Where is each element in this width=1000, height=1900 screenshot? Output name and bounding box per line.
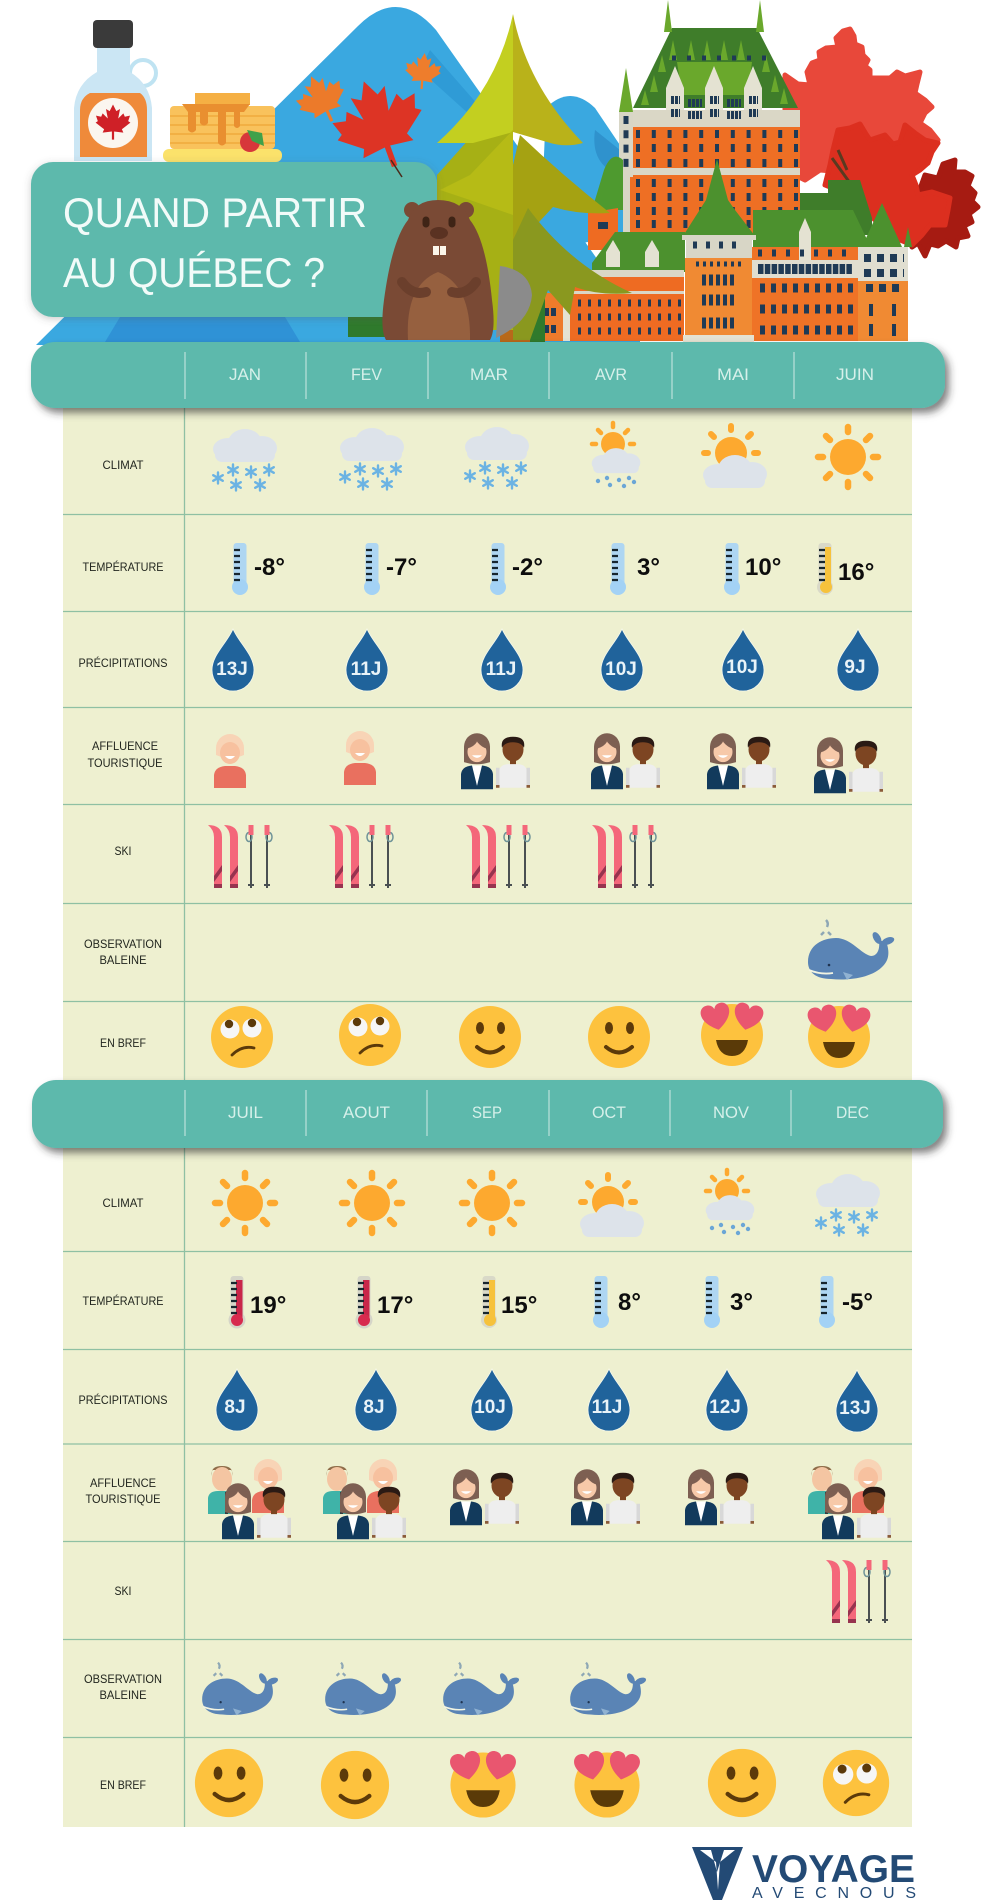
- jan days: 13J: [216, 659, 248, 680]
- jan snow: [213, 429, 277, 490]
- mountain facet right: [594, 130, 620, 175]
- label: PRÉCIPITATIONS: [78, 657, 168, 670]
- shaded mountain base: [105, 317, 300, 342]
- apr sun rain: [592, 423, 640, 488]
- right tower lower: [858, 281, 908, 341]
- may thermometer: [724, 543, 740, 595]
- main roof: [633, 28, 798, 108]
- strawberry: [240, 132, 260, 152]
- right tower tall windows: [871, 304, 894, 341]
- dormer right: [799, 218, 811, 262]
- light red foliage: [785, 29, 938, 180]
- small orange house: [588, 208, 618, 250]
- row: baleine 2: [84, 1663, 647, 1715]
- pavilion windows mid: [702, 280, 735, 323]
- aug drop: [355, 1369, 397, 1431]
- left wing dormers: [606, 240, 659, 267]
- castle: Château Frontenac: [540, 0, 912, 342]
- month band 2: [32, 1080, 943, 1148]
- left wing roof: [592, 232, 685, 272]
- FEV: FEV: [351, 365, 383, 384]
- beaver: [382, 200, 532, 340]
- mar ski: [466, 825, 530, 888]
- label: PRÉCIPITATIONS: [78, 1394, 168, 1407]
- illustration: Quebec skyline header: [36, 0, 978, 345]
- row: ski 2: [114, 1560, 890, 1623]
- aug whale: [325, 1663, 402, 1715]
- pancake lines: [170, 116, 275, 143]
- green hill behind: [592, 157, 623, 210]
- dec days: 13J: [839, 1398, 871, 1419]
- roof spires: [641, 0, 788, 105]
- SEP: SEP: [472, 1103, 502, 1122]
- feb thermometer: [364, 543, 380, 595]
- tower walls: [630, 120, 800, 240]
- jan thermometer: [232, 543, 248, 595]
- top layer left: [437, 14, 513, 143]
- jan one tourist: [214, 734, 246, 788]
- logo: Voyage avec nous: [692, 1847, 916, 1900]
- label: SKI: [114, 1586, 132, 1598]
- sep days: 10J: [474, 1397, 506, 1418]
- strawberry top: [247, 130, 264, 146]
- oct emoji: [573, 1750, 641, 1818]
- dec snow: [816, 1174, 880, 1236]
- july days: 8J: [224, 1397, 246, 1418]
- bottle handle: [130, 60, 156, 86]
- feb ski: [329, 825, 393, 888]
- june sun: [818, 427, 878, 487]
- month band 1: [31, 342, 945, 408]
- pine tree: [348, 14, 632, 342]
- oct days: 11J: [592, 1397, 622, 1418]
- june thermometer: [817, 543, 833, 595]
- sep sun: [462, 1173, 522, 1233]
- central pavilion roof: [683, 159, 755, 236]
- row: temperature 2: [82, 1276, 873, 1328]
- label: OBSERVATION: [84, 1674, 162, 1686]
- band dividers: [185, 1090, 791, 1136]
- left tree mass: [437, 90, 513, 330]
- june emoji: [806, 1003, 872, 1068]
- middle layer right: [513, 135, 610, 250]
- left turret: [619, 68, 633, 112]
- annex column: [563, 277, 570, 341]
- jan drop: [212, 629, 254, 691]
- JUIL: JUIL: [228, 1103, 263, 1122]
- mountain facet: [420, 50, 500, 130]
- may couple: [707, 733, 776, 789]
- july whale: [202, 1663, 279, 1715]
- logo wordmark: VOYAGE: [752, 1848, 915, 1891]
- apr drop: [601, 629, 643, 691]
- belly: [408, 272, 470, 340]
- may sun cloud: [703, 426, 767, 488]
- feb emoji: [339, 1004, 401, 1066]
- sep emoji: [449, 1750, 517, 1818]
- trunk: [500, 300, 530, 342]
- mar snow: [465, 427, 529, 488]
- oct temperature: 8°: [618, 1289, 641, 1316]
- apr couple: [591, 733, 660, 789]
- aug emoji: [321, 1751, 389, 1819]
- nose: [430, 227, 448, 239]
- july sun: [215, 1173, 275, 1233]
- row: affluence 2: [86, 1459, 891, 1539]
- aug thermometer: [356, 1276, 372, 1328]
- oct drop: [588, 1369, 630, 1431]
- july thermometer: [228, 1276, 246, 1328]
- pavilion base: [683, 335, 754, 342]
- right wing roof: [753, 210, 872, 250]
- feb temperature: -7°: [386, 554, 417, 581]
- ground green: [348, 317, 408, 337]
- body: [382, 200, 494, 340]
- july emoji: [195, 1749, 263, 1817]
- row: climat 2: [102, 1170, 880, 1237]
- dark red foliage: [905, 160, 978, 256]
- small orange leaf: [404, 52, 442, 91]
- feb one tourist: [344, 731, 376, 785]
- sep couple: [450, 1469, 519, 1525]
- may temperature: 10°: [745, 554, 781, 581]
- OCT: OCT: [592, 1103, 626, 1122]
- right tower windows: [864, 258, 904, 288]
- mar temperature: -2°: [512, 554, 543, 581]
- pavilion band windows: [693, 242, 745, 248]
- label: TEMPÉRATURE: [82, 1295, 164, 1308]
- mar thermometer: [490, 543, 506, 595]
- mar days: 11J: [486, 659, 516, 680]
- icon: pancakes: [163, 93, 282, 162]
- bottle glass: [74, 48, 152, 161]
- maple leaves: [289, 52, 442, 181]
- syrup: [80, 93, 147, 157]
- NOV: NOV: [713, 1103, 750, 1122]
- panel windows: [671, 100, 758, 115]
- sep drop: [471, 1369, 513, 1431]
- oct whale: [570, 1663, 647, 1715]
- may days: 10J: [726, 657, 758, 678]
- label: SKI: [114, 846, 132, 858]
- JAN: JAN: [229, 365, 261, 384]
- right wing walls: [752, 247, 858, 341]
- row: affluence 1: [88, 731, 883, 793]
- label line 2: TOURISTIQUE: [88, 758, 163, 770]
- left wing windows: [578, 303, 682, 331]
- nov sun rain: [706, 1170, 754, 1235]
- wing windows: [760, 288, 854, 330]
- plate: [163, 149, 282, 162]
- heading line 1: QUAND PARTIR: [63, 189, 367, 236]
- pavilion walls: [685, 258, 752, 340]
- label: [88, 98, 138, 148]
- nov days: 12J: [709, 1397, 741, 1418]
- ears: [404, 202, 420, 218]
- jan temperature: -8°: [254, 554, 285, 581]
- jan emoji: [211, 1006, 273, 1068]
- sep whale: [443, 1663, 520, 1715]
- dark roof mass: [800, 180, 872, 235]
- band windows: [758, 264, 852, 274]
- maple leaf on label: [96, 104, 130, 140]
- sep thermometer: [481, 1276, 497, 1328]
- JUIN: JUIN: [836, 365, 874, 384]
- dec drop: [836, 1370, 878, 1432]
- red maple tree: [785, 29, 978, 256]
- row: climat 1: [102, 423, 878, 490]
- annex windows: [544, 312, 558, 329]
- nov thermometer: [704, 1276, 720, 1328]
- band background: [32, 1080, 943, 1148]
- left annex: [540, 293, 563, 341]
- left wing cornice: [560, 270, 684, 294]
- teeth: [433, 246, 446, 255]
- MAI: MAI: [717, 365, 749, 384]
- mid red foliage: [825, 124, 950, 245]
- table 1 background: [63, 400, 912, 1080]
- DEC: DEC: [836, 1103, 869, 1122]
- label: CLIMAT: [102, 1198, 144, 1210]
- nov drop: [706, 1369, 748, 1431]
- sep temperature: 15°: [501, 1292, 537, 1319]
- row: baleine 1: [84, 920, 895, 980]
- july crowd: [208, 1459, 291, 1539]
- big blue mountain: [36, 7, 640, 345]
- feb drop: [346, 629, 388, 691]
- row: ski 1: [114, 825, 656, 888]
- medium orange leaf: [289, 66, 354, 132]
- nov couple: [685, 1469, 754, 1525]
- apr thermometer: [610, 543, 626, 595]
- label: OBSERVATION: [84, 939, 162, 951]
- label: EN BREF: [100, 1038, 146, 1050]
- label: AFFLUENCE: [92, 741, 158, 753]
- label: AFFLUENCE: [90, 1478, 156, 1490]
- logo mark: [692, 1847, 743, 1900]
- dec temperature: -5°: [842, 1289, 873, 1316]
- jan ski: [208, 825, 272, 888]
- table grid lines: [63, 400, 912, 1827]
- green bush: [530, 280, 545, 342]
- apr temperature: 3°: [637, 554, 660, 581]
- heading line 2: AU QUÉBEC ?: [63, 249, 325, 296]
- syrup drips: [182, 104, 250, 146]
- bottle cap: [93, 20, 133, 48]
- tower window rows: [636, 134, 800, 224]
- ear right: [458, 202, 474, 218]
- title box: [31, 162, 437, 317]
- june drop: [837, 629, 879, 691]
- oct couple: [571, 1469, 640, 1525]
- may emoji: [699, 1001, 765, 1066]
- june whale: [808, 920, 895, 980]
- red leaf stem: [391, 160, 402, 177]
- dormers: [666, 66, 762, 110]
- mar drop: [481, 629, 523, 691]
- right tower upper: [858, 247, 908, 281]
- eyes: [426, 220, 452, 224]
- title panel: [31, 162, 437, 317]
- tail: [496, 266, 532, 338]
- icon: maple syrup bottle: [74, 20, 156, 161]
- oct thermometer: [593, 1276, 609, 1328]
- nov temperature: 3°: [730, 1289, 753, 1316]
- roof windows: [672, 56, 768, 60]
- lower layer right: [513, 208, 632, 340]
- aug temperature: 17°: [377, 1292, 413, 1319]
- dec thermometer: [819, 1276, 835, 1328]
- apr emoji: [588, 1006, 650, 1068]
- label line 2: BALEINE: [100, 1690, 147, 1702]
- house window: [598, 222, 608, 229]
- dec emoji: [823, 1750, 889, 1816]
- left wing walls: [568, 277, 684, 341]
- AVR: AVR: [595, 365, 627, 384]
- turret windows: [624, 116, 628, 170]
- june days: 9J: [844, 657, 866, 678]
- top layer right: [513, 14, 583, 145]
- turret column: [619, 112, 633, 232]
- may drop: [722, 629, 764, 691]
- cream window band: [752, 260, 858, 278]
- label: EN BREF: [100, 1780, 146, 1792]
- mar couple: [461, 733, 530, 789]
- label line 2: TOURISTIQUE: [86, 1494, 161, 1506]
- aug days: 8J: [363, 1397, 385, 1418]
- AOUT: AOUT: [343, 1103, 390, 1122]
- oct sun cloud: [580, 1175, 644, 1237]
- lower layer left: [440, 130, 513, 215]
- attic windows: [758, 250, 852, 256]
- band background: [31, 342, 945, 408]
- label line 2: BALEINE: [100, 955, 147, 967]
- tower cornices: [620, 110, 800, 175]
- red leaf: [322, 66, 437, 181]
- label: CLIMAT: [102, 460, 144, 472]
- aug crowd: [323, 1459, 406, 1539]
- tree trunk: [832, 150, 850, 183]
- upper roof band: [677, 62, 752, 95]
- row: temperature 1: [82, 543, 874, 595]
- arms: [402, 282, 476, 293]
- july temperature: 19°: [250, 1292, 286, 1319]
- dec ski: [826, 1560, 890, 1623]
- band dividers: [185, 352, 794, 399]
- dec crowd: [808, 1459, 891, 1539]
- pavilion band: [682, 235, 756, 258]
- right tower roof: [862, 203, 912, 247]
- feb snow: [340, 428, 404, 490]
- pancake stack: [170, 106, 275, 149]
- apr ski: [592, 825, 656, 888]
- label: TEMPÉRATURE: [82, 561, 164, 574]
- table 2 background: [63, 1140, 912, 1827]
- nov emoji: [708, 1749, 776, 1817]
- pavilion windows: [696, 262, 742, 266]
- row: precipitations 1: [78, 629, 879, 691]
- top pancakes: [195, 93, 250, 105]
- row: precipitations 2: [78, 1369, 878, 1432]
- mar emoji: [459, 1006, 521, 1068]
- june temperature: 16°: [838, 559, 874, 586]
- MAR: MAR: [470, 365, 508, 384]
- july drop: [216, 1369, 258, 1431]
- june couple: [814, 737, 883, 793]
- second mountain: [540, 96, 630, 250]
- feb days: 11J: [351, 659, 381, 680]
- aug sun: [342, 1173, 402, 1233]
- apr days: 10J: [605, 659, 637, 680]
- row: en bref 2: [100, 1749, 889, 1819]
- row: en bref 1: [100, 1001, 872, 1068]
